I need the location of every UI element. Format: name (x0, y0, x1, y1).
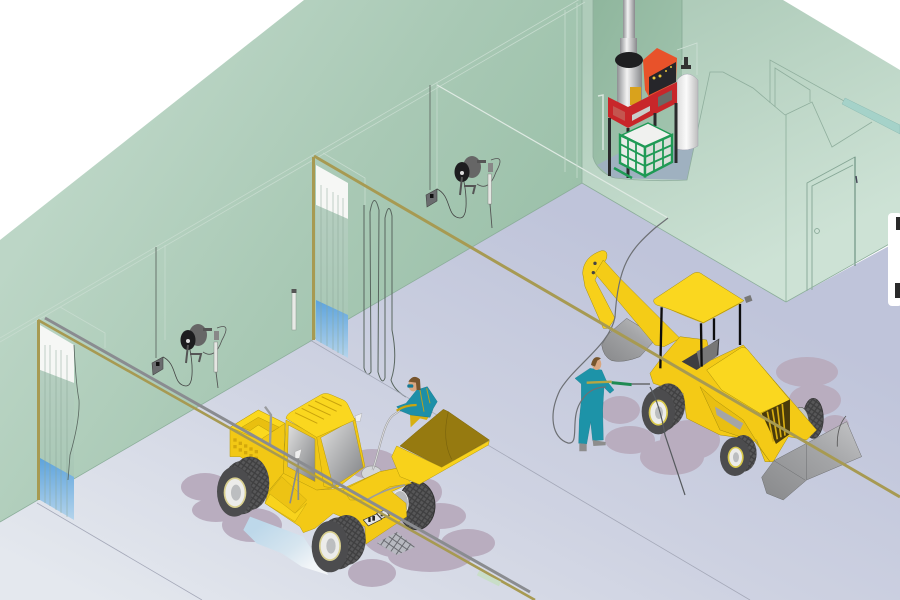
worker: loader operator (397, 377, 437, 427)
hose reel station: left (152, 247, 226, 388)
hood (707, 347, 790, 413)
canopy front posts (660, 307, 702, 368)
red frame (608, 82, 677, 128)
body (265, 468, 410, 544)
hanging hoses (68, 200, 406, 480)
far front wheel (392, 482, 435, 530)
water spray (243, 517, 328, 575)
loader arm (700, 387, 770, 462)
panel: right wall (582, 0, 900, 302)
backhoe loader (583, 251, 862, 500)
burner cabinet (643, 48, 677, 97)
curtain: middle bay (314, 157, 348, 358)
wheel loader (217, 393, 489, 572)
backhoe bucket (602, 318, 657, 361)
worker: pressure washer (575, 357, 650, 451)
ceiling water lines (0, 0, 668, 348)
door (807, 157, 857, 291)
bucket (392, 409, 489, 484)
shadow: loader puddle (181, 449, 495, 587)
overhead pipe: front bay gray (45, 318, 530, 592)
grille (762, 399, 790, 444)
body (650, 337, 817, 462)
spray nozzle (478, 573, 500, 584)
back room window and pipe (770, 60, 900, 147)
washer hoses (553, 218, 685, 495)
panel: left wall (0, 0, 582, 522)
canopy (654, 272, 752, 323)
overhead pipe: rear bay tan (314, 156, 900, 497)
tires (217, 457, 269, 517)
pipework left of stand (598, 95, 603, 150)
tires (642, 383, 685, 434)
cab (283, 393, 365, 490)
floor (0, 183, 900, 600)
wash lance and base (362, 406, 413, 481)
front bucket (762, 416, 862, 500)
tank valves (681, 57, 691, 69)
rear engine block (230, 410, 285, 493)
backhoe boom (583, 251, 680, 347)
flue (615, 0, 643, 108)
stand legs (610, 103, 676, 178)
exhaust and mirrors (265, 407, 362, 503)
curtain: left bay (38, 320, 74, 520)
boiler system (598, 0, 698, 178)
floor drain (377, 532, 415, 555)
green tote (614, 123, 672, 178)
hose reel station: right (426, 85, 500, 228)
floor lines (37, 340, 750, 600)
loader arm (343, 468, 412, 500)
shadow: backhoe puddle (600, 357, 849, 475)
panel: boiler alcove (593, 0, 785, 181)
overhead pipe: front bay tan (38, 320, 535, 600)
white gas tank (677, 74, 698, 150)
canopy posts rear (714, 304, 740, 345)
far wheel (792, 398, 823, 439)
number plate (363, 510, 389, 526)
wall wand holder (292, 289, 296, 330)
side handle (888, 213, 900, 306)
